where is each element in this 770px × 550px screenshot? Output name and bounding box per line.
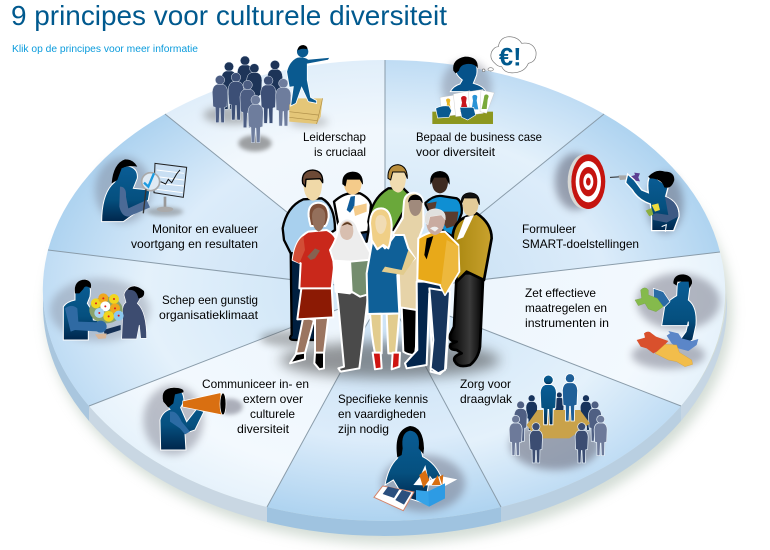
icon: leiderschap bbox=[203, 45, 330, 151]
label: communiceer bbox=[202, 377, 309, 436]
label: klimaat: Schep een gunstig bbox=[162, 293, 258, 307]
person: old man yellow jacket bbox=[405, 209, 459, 374]
person: woman white hijab bbox=[330, 218, 374, 372]
label: monitor: Monitor en evalueer bbox=[152, 222, 258, 236]
person: man white shirt bbox=[334, 172, 371, 242]
people group bbox=[260, 165, 500, 378]
person: woman blue top bbox=[425, 171, 462, 237]
disk bbox=[43, 60, 732, 544]
slice: draagvlak bbox=[385, 291, 681, 507]
icon: draagvlak bbox=[509, 374, 607, 470]
label: kennis: zijn nodig bbox=[338, 422, 389, 436]
person: woman beige hijab bbox=[393, 193, 423, 355]
label: monitor: voortgang en resultaten bbox=[131, 237, 258, 251]
label: leiderschap bbox=[303, 130, 366, 159]
label: draagvlak bbox=[460, 377, 513, 406]
slice: leiderschap bbox=[165, 60, 385, 291]
slice: monitor bbox=[48, 114, 385, 291]
label: maatregelen: instrumenten in bbox=[525, 316, 609, 330]
label: maatregelen bbox=[525, 286, 609, 330]
label: communiceer: extern over bbox=[243, 392, 303, 406]
label: draagvlak: Zorg voor bbox=[460, 377, 511, 391]
label: draagvlak: draagvlak bbox=[460, 392, 513, 406]
label: klimaat bbox=[159, 293, 259, 322]
label: smart: Formuleer bbox=[522, 222, 576, 236]
rim segments bbox=[43, 291, 727, 536]
person: woman in red bbox=[290, 203, 337, 369]
icon: thought bubble bbox=[482, 37, 536, 73]
icon: puzzle bbox=[632, 273, 720, 369]
label: smart bbox=[522, 222, 639, 251]
slice: smart bbox=[385, 114, 720, 291]
person: blonde woman in blue dress bbox=[367, 208, 415, 369]
label: communiceer: Communiceer in- en bbox=[202, 377, 309, 391]
icon: business case bbox=[432, 57, 494, 124]
label: kennis: en vaardigheden bbox=[338, 407, 426, 421]
label: business case bbox=[416, 130, 542, 159]
slice: communiceer bbox=[89, 291, 385, 507]
label: leiderschap: is cruciaal bbox=[314, 145, 366, 159]
subtitle: Klik op de principes voor meer informatie bbox=[12, 44, 198, 55]
icon: monitor bbox=[95, 157, 187, 223]
slice: maatregelen bbox=[385, 252, 725, 406]
slice: klimaat bbox=[43, 250, 385, 406]
icon: megaphone bbox=[143, 385, 243, 455]
slice: business case bbox=[385, 60, 604, 291]
label: monitor bbox=[131, 222, 258, 251]
slice: kennis bbox=[267, 291, 501, 521]
icon: flowers bbox=[50, 278, 150, 342]
label: kennis: Specifieke kennis bbox=[338, 392, 428, 406]
person: man green shirt bbox=[368, 165, 412, 230]
label: communiceer: diversiteit bbox=[237, 422, 290, 436]
label: maatregelen: maatregelen en bbox=[525, 301, 607, 315]
label: klimaat: organisatieklimaat bbox=[159, 308, 259, 322]
label: smart: SMART-doelstellingen bbox=[522, 237, 639, 251]
label: business case: voor diversiteit bbox=[416, 145, 496, 159]
label: leiderschap: Leiderschap bbox=[303, 130, 366, 144]
label: maatregelen: Zet effectieve bbox=[525, 286, 596, 300]
icon: thought bubble: €! bbox=[499, 43, 522, 71]
icon: target and dart player bbox=[555, 153, 683, 233]
person: man mustard jacket bbox=[450, 193, 492, 366]
icon: toolbox bbox=[374, 426, 465, 512]
title: 9 principes voor culturele diversiteit bbox=[11, 0, 447, 31]
label: communiceer: culturele bbox=[250, 407, 295, 421]
label: business case: Bepaal de business case bbox=[416, 130, 542, 144]
person: man blue shirt bbox=[283, 170, 335, 340]
label: kennis bbox=[338, 392, 428, 436]
